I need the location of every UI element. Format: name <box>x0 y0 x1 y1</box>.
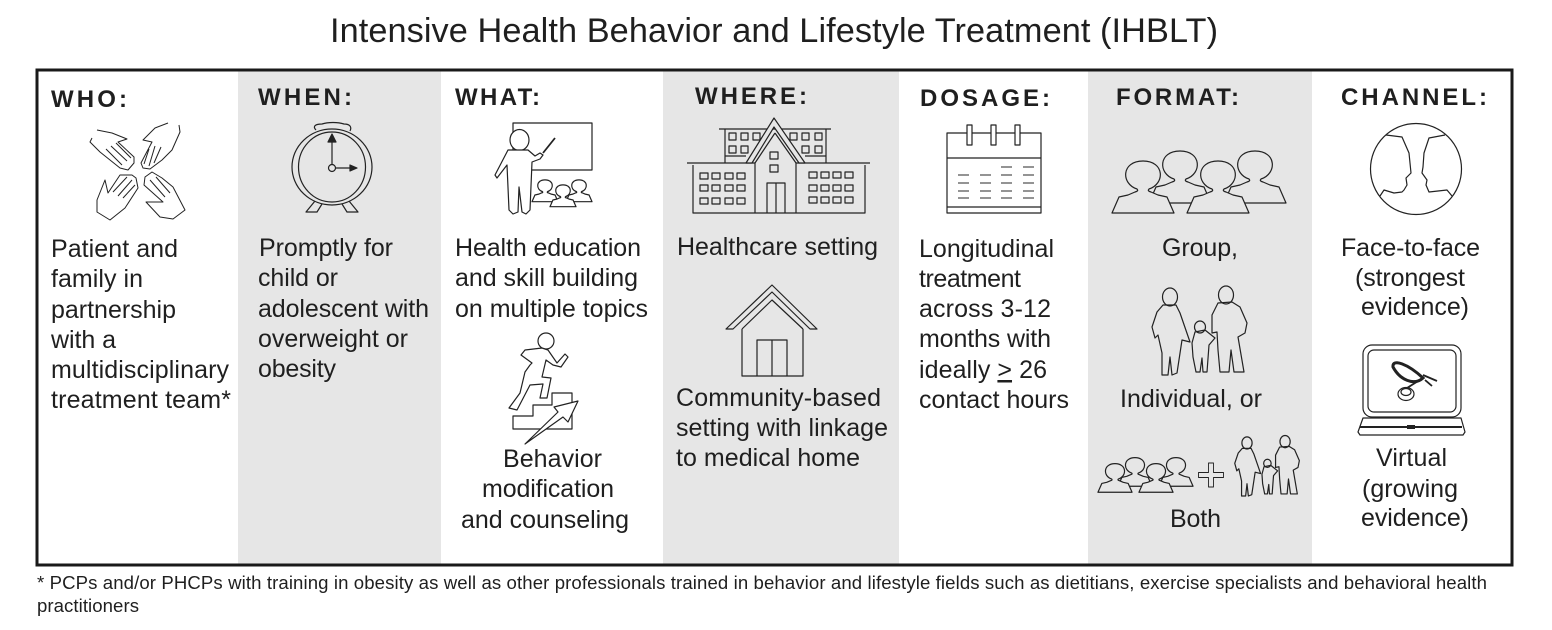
text: community setting: setting with linkage <box>676 414 888 442</box>
panel: when <box>238 71 441 564</box>
text: virtual: evidence) <box>1361 504 1469 532</box>
icon: healthcare building <box>687 118 870 213</box>
text: face to face: (strongest <box>1355 264 1465 292</box>
icon: calendar <box>947 125 1041 213</box>
panel: where <box>663 71 899 564</box>
panel: who <box>38 71 238 564</box>
text: virtual <box>1361 444 1469 532</box>
text: community setting: to medical home <box>676 444 860 472</box>
icon: teacher at board <box>495 123 592 214</box>
text: behavior modification: modification <box>482 475 614 503</box>
text: behavior modification: and counseling <box>461 506 629 534</box>
panel: channel <box>1312 71 1512 564</box>
heading: channel: CHANNEL: <box>1341 84 1487 111</box>
icon: laptop with stethoscope <box>1358 345 1465 435</box>
text: who: treatment team* <box>51 386 231 414</box>
text: behavior modification: Behavior <box>503 445 602 473</box>
text: healthcare setting: Healthcare setting <box>677 233 878 261</box>
text: when <box>258 234 429 383</box>
text: dosage: treatment <box>919 265 1021 293</box>
icon: group of people <box>1112 151 1286 213</box>
heading: dosage: DOSAGE: <box>920 85 1050 112</box>
text: behavior modification <box>461 445 629 534</box>
text: community setting <box>676 384 888 472</box>
text: face to face: evidence) <box>1361 293 1469 321</box>
panel: dosage <box>899 71 1088 564</box>
text: who: Patient and <box>51 235 178 263</box>
text: who: family in <box>51 265 143 293</box>
text: who: multidisciplinary <box>51 356 230 384</box>
text: when: adolescent with <box>258 295 429 323</box>
text: health education: Health education <box>455 234 641 262</box>
icon: two faces in circle <box>1370 124 1462 214</box>
icon: runner on stairs <box>509 333 578 444</box>
icon: house <box>726 285 817 376</box>
heading: when: WHEN: <box>258 84 352 111</box>
heading: who: WHO: <box>51 86 127 113</box>
text: community setting: Community-based <box>676 384 881 412</box>
text: health education: on multiple topics <box>455 295 648 323</box>
text: who: partnership <box>51 296 176 324</box>
text: who: with a <box>50 326 116 354</box>
heading: format: FORMAT: <box>1116 84 1239 111</box>
text: health education: and skill building <box>455 264 638 292</box>
text: virtual: Virtual <box>1376 444 1447 472</box>
text: health education <box>455 234 648 323</box>
text: individual: Individual, or <box>1120 385 1262 413</box>
panel: format <box>1088 71 1312 564</box>
icon: group plus family <box>1098 435 1299 496</box>
text: virtual: (growing <box>1362 475 1458 503</box>
text: face to face: Face-to-face <box>1341 234 1480 262</box>
heading: where: WHERE: <box>695 83 807 110</box>
footnote: practitioners <box>37 595 139 616</box>
text: when: Promptly for <box>259 234 393 262</box>
text: face to face <box>1341 234 1480 321</box>
icon: family <box>1152 286 1247 375</box>
text: both: Both <box>1170 505 1221 533</box>
text: dosage <box>919 235 1069 414</box>
heading: what: WHAT: <box>455 84 540 111</box>
text: dosage: across 3-12 <box>919 295 1051 323</box>
text: group: Group, <box>1162 234 1238 262</box>
footnote <box>37 572 1487 616</box>
table frame <box>37 70 1512 565</box>
text: when: obesity <box>258 355 336 383</box>
icon: clock <box>292 122 372 212</box>
text: who <box>50 235 231 414</box>
title: Intensive Health Behavior and Lifestyle Treatment (IHBLT) <box>330 12 1218 50</box>
text: when: overweight or <box>258 325 408 353</box>
text: dosage: Longitudinal <box>919 235 1054 263</box>
icon: four hands <box>90 123 185 220</box>
footnote: * PCPs and/or PHCPs with training in obesity as well as other professionals trained in behavior and lifestyle fields such as dietitians, exercise specialists and behavioral health <box>37 572 1487 593</box>
text: dosage: contact hours <box>919 386 1069 414</box>
text: dosage: ideally > 26 <box>919 356 1047 384</box>
panel: what <box>441 71 663 564</box>
text: dosage: months with <box>919 325 1051 353</box>
text: when: child or <box>258 264 338 292</box>
